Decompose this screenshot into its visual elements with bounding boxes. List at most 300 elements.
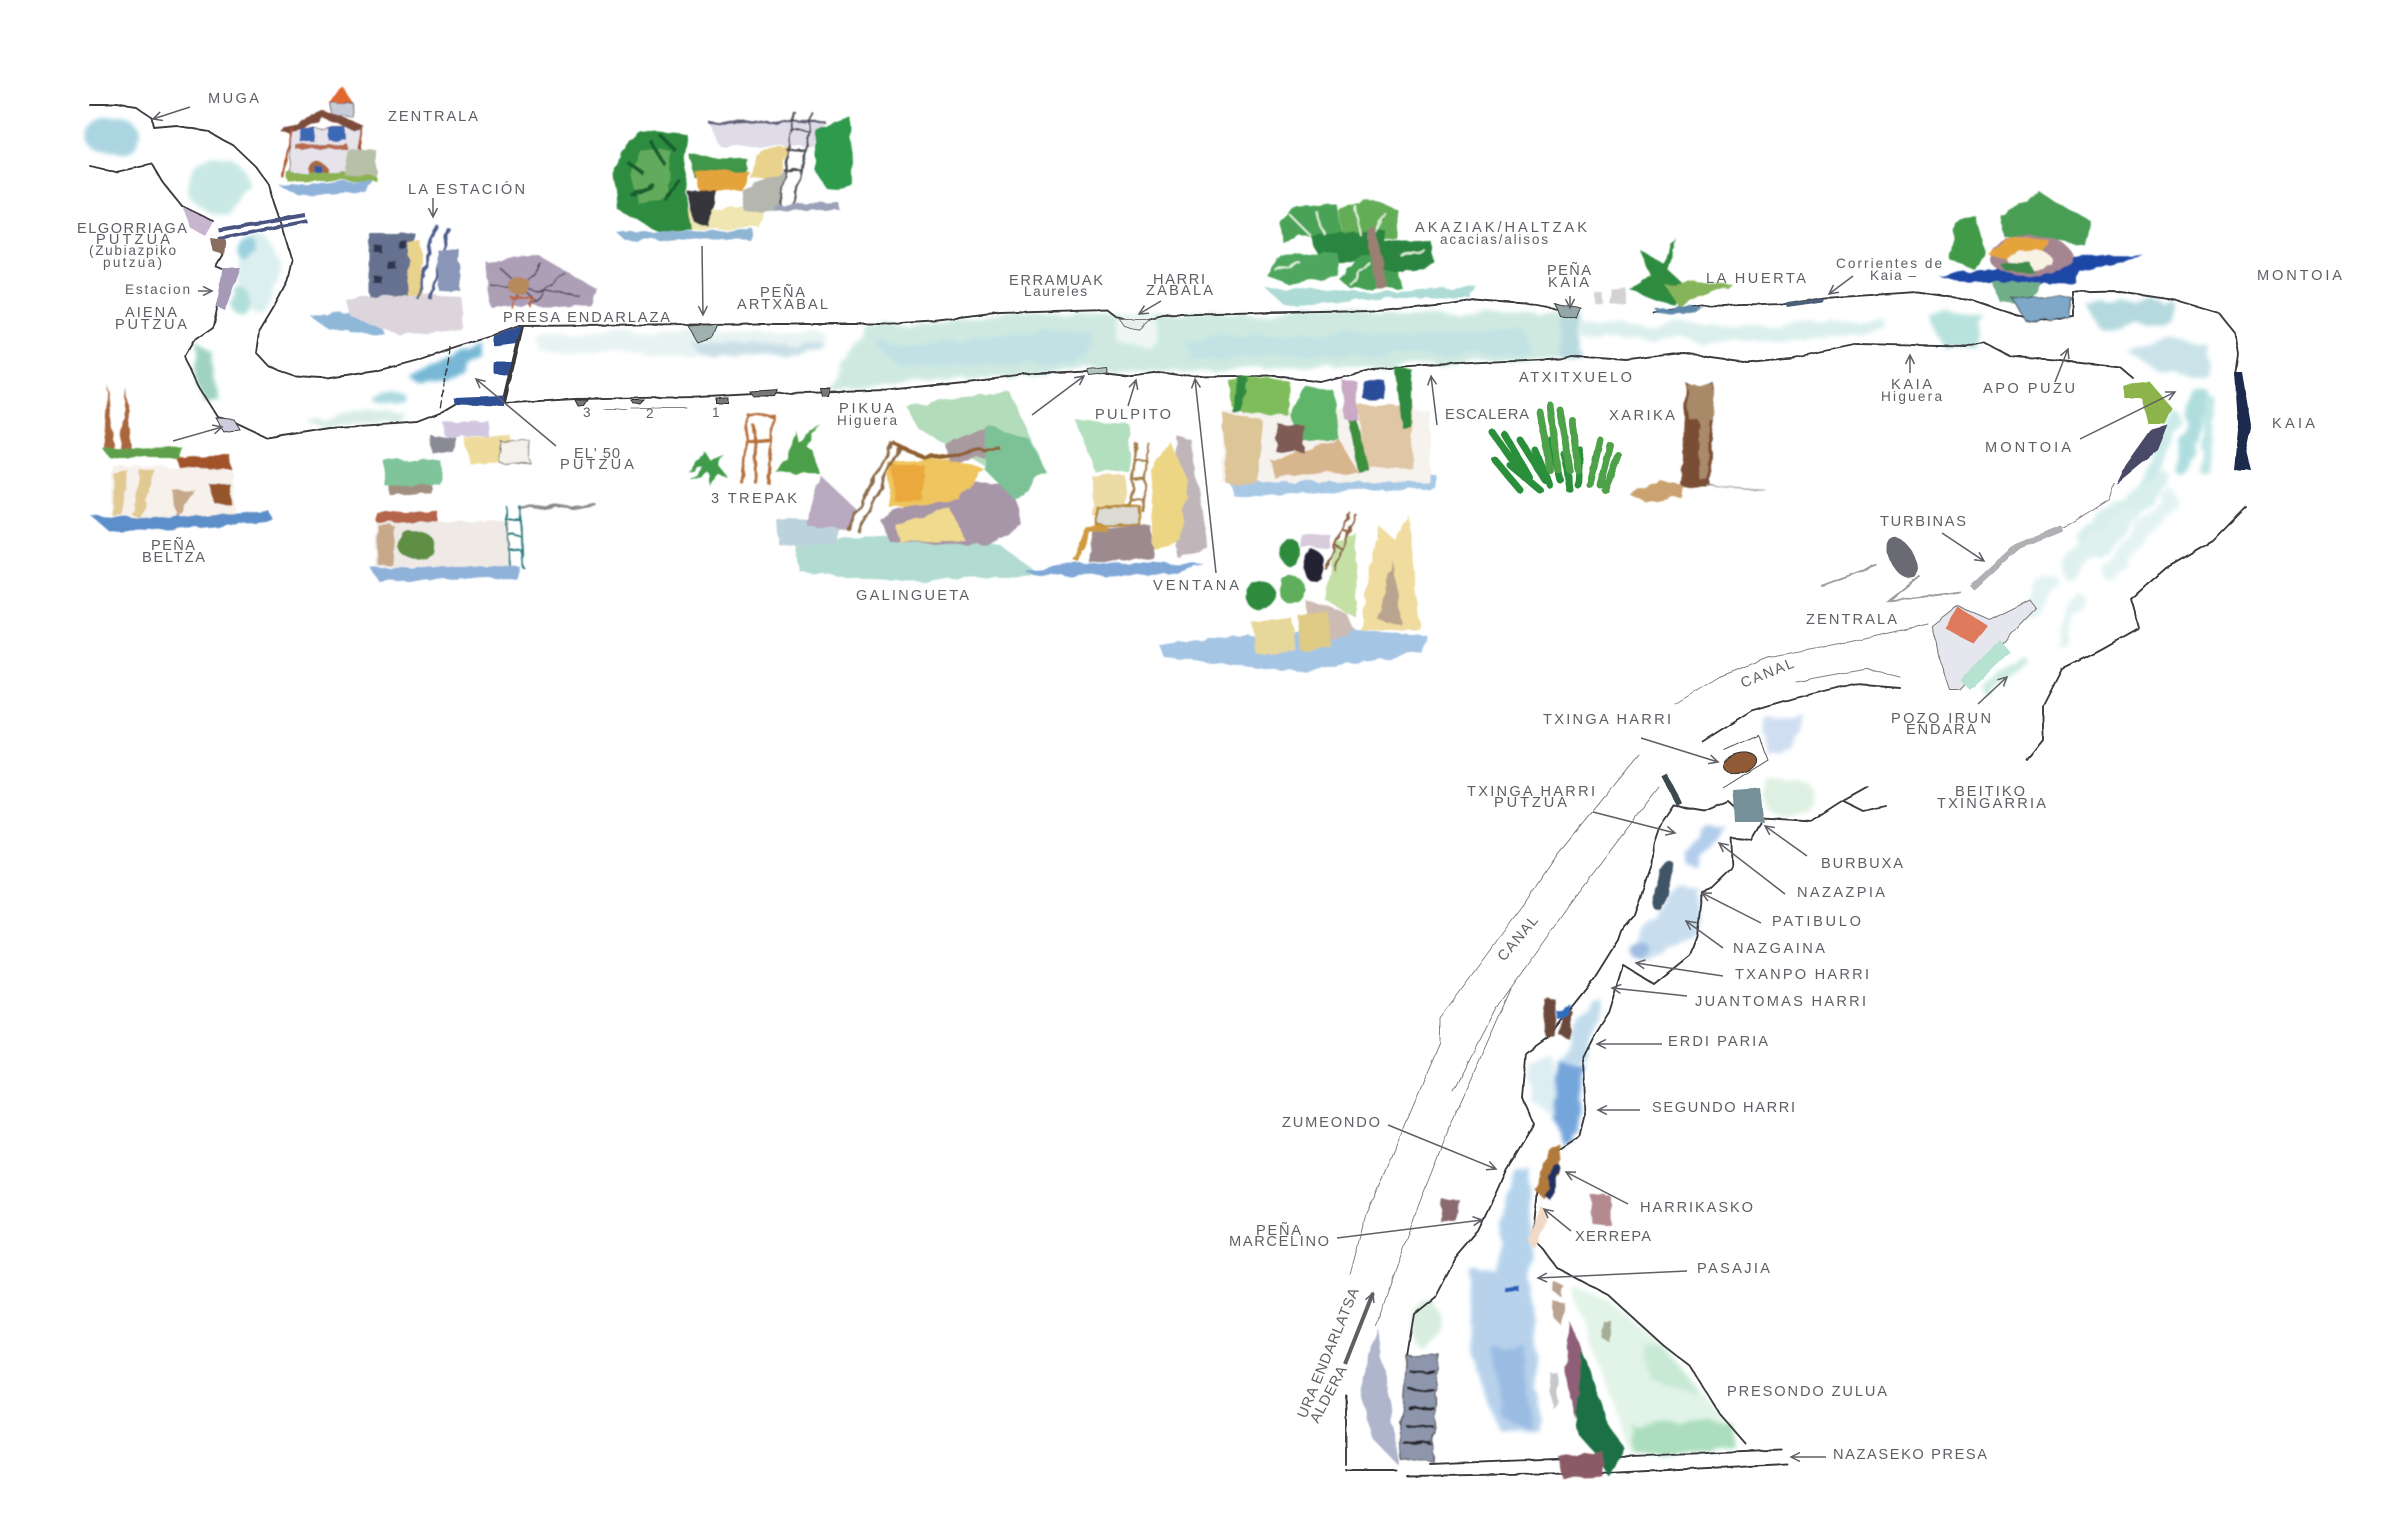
label: Nazgaina: NAZGAINA xyxy=(1733,941,1825,957)
wash: bend and dam approach xyxy=(305,344,484,426)
gray xyxy=(1176,436,1209,556)
label: Canal upper: CANAL xyxy=(1739,656,1796,692)
arrow: Nazazpia xyxy=(1719,843,1785,894)
door blue xyxy=(314,166,322,177)
north bank, Kaia reach xyxy=(1653,291,2249,470)
yellow rock xyxy=(750,146,790,180)
label: Harrikasko: HARRIKASKO xyxy=(1640,1200,1753,1216)
label: Canal lower: CANAL xyxy=(1495,913,1542,965)
chair brown xyxy=(1276,424,1304,452)
label: Peña Kaia: PEÑA xyxy=(1547,262,1591,279)
river water washes xyxy=(85,119,2212,1455)
island xyxy=(1649,858,1677,912)
label: Marcelino: MARCELINO xyxy=(1229,1234,1329,1250)
ladder xyxy=(1326,512,1356,570)
wall white xyxy=(1222,410,1430,482)
rocks xyxy=(880,480,1022,545)
green background xyxy=(905,392,1046,480)
label: Erdi Paria: ERDI PARIA xyxy=(1668,1034,1768,1050)
arrow: Turbinas xyxy=(1942,533,1984,561)
lower green xyxy=(1992,282,2040,304)
red roof xyxy=(1945,607,1988,644)
scene: Galingueta xyxy=(775,392,1046,582)
dark xyxy=(388,485,432,494)
label: number 2: 2 xyxy=(646,406,654,421)
label: Endara: ENDARA xyxy=(1906,722,1976,738)
label: Pikua: PIKUA xyxy=(839,401,894,417)
label: Erramuak: ERRAMUAK xyxy=(1009,273,1103,289)
brown rock xyxy=(209,484,232,505)
navy xyxy=(1545,1165,1560,1200)
balcony xyxy=(295,144,348,149)
label: Segundo Harri: SEGUNDO HARRI xyxy=(1652,1100,1795,1116)
arrow: Peña Beltza xyxy=(173,427,222,441)
window xyxy=(500,441,530,463)
hatch xyxy=(431,436,455,453)
label: La Estación: LA ESTACIÓN xyxy=(408,181,525,198)
trunk top xyxy=(1687,385,1713,420)
label: Escalera: ESCALERA xyxy=(1445,407,1529,423)
yellow spire xyxy=(1360,515,1420,630)
label: Xerrepa: XERREPA xyxy=(1575,1229,1651,1245)
arrow: Txinga Harri xyxy=(1641,738,1718,762)
label: Harri: HARRI xyxy=(1153,272,1205,288)
rock blue xyxy=(1360,1326,1398,1465)
direction arrow xyxy=(1345,1293,1373,1364)
scene: Ventana rocks xyxy=(1158,512,1428,672)
clump right xyxy=(1378,240,1434,274)
wash: middle channel blues xyxy=(1495,1000,1602,1285)
water xyxy=(616,230,754,240)
arrow: Peña Kaia xyxy=(1569,296,1571,308)
south bank xyxy=(90,164,2134,438)
ground xyxy=(1708,486,1766,491)
brown pair xyxy=(1544,998,1572,1040)
wash: straight reach pale xyxy=(534,330,828,356)
scene: 3 Trepak xyxy=(686,415,820,486)
tree top xyxy=(1280,538,1300,566)
lower river left bank xyxy=(1407,806,1674,1356)
lilac xyxy=(1301,535,1331,548)
ladder xyxy=(780,112,812,205)
rail xyxy=(893,443,1000,458)
lilac xyxy=(443,421,489,436)
wash: lower basin blues and greens xyxy=(1413,1270,1738,1455)
label: Zabala: ZABALA xyxy=(1146,283,1213,299)
fence plant xyxy=(346,150,376,176)
scene: Txinga Harri hut xyxy=(1664,735,1768,822)
turbine oval xyxy=(1880,532,1924,584)
rocks tan xyxy=(1552,1282,1564,1326)
arrow: Muga xyxy=(153,107,190,119)
top line xyxy=(708,121,825,123)
harrikasko rock xyxy=(1535,1146,1562,1200)
arrow: Estacion xyxy=(198,290,212,292)
label: Zentrala 2: ZENTRALA xyxy=(1806,612,1897,628)
island pink edge xyxy=(1565,1322,1582,1420)
chair blue xyxy=(1363,380,1384,399)
rock tans xyxy=(112,470,155,518)
hut frame xyxy=(1723,735,1768,788)
east bank Montoia xyxy=(2027,507,2246,760)
posts xyxy=(283,128,361,178)
tan wedge xyxy=(172,490,195,518)
scene: Apo Puzu house xyxy=(1939,192,2144,320)
label: Turbinas: TURBINAS xyxy=(1880,514,1966,530)
yellow bottom xyxy=(895,508,965,542)
rock white xyxy=(110,465,236,522)
yellow xyxy=(463,435,514,464)
water xyxy=(310,310,386,335)
water xyxy=(90,512,274,532)
label: Presa Endarlaza: PRESA ENDARLAZA xyxy=(503,310,670,326)
box right xyxy=(1590,1195,1610,1224)
Presa Endarlaza dam xyxy=(440,326,522,410)
label: Estacion: Estacion xyxy=(125,282,190,297)
water xyxy=(1654,306,1703,313)
tan left xyxy=(1222,412,1262,484)
label: Putzua 3: PUTZUA xyxy=(560,457,634,473)
green pale xyxy=(1325,532,1356,618)
water green xyxy=(795,535,1040,582)
building grey xyxy=(1932,600,2036,690)
leaf strokes xyxy=(625,135,680,200)
rock green xyxy=(1601,1320,1610,1343)
label: Muga: MUGA xyxy=(208,91,259,107)
arrow: Apo Puzu xyxy=(2055,349,2068,382)
right tree xyxy=(815,117,853,190)
wash: main mint reach xyxy=(826,312,1581,387)
tree mid xyxy=(1279,576,1305,604)
tower xyxy=(105,385,131,449)
maroon box xyxy=(1558,1452,1603,1478)
tree left xyxy=(1246,581,1276,611)
arrow: Harri Zabala xyxy=(1139,301,1161,314)
line xyxy=(519,505,596,508)
label: Kaia corrientes: Kaia – xyxy=(1870,268,1916,283)
green ledge xyxy=(103,447,182,458)
clump lower xyxy=(1340,254,1402,288)
bush xyxy=(1665,282,1733,308)
scene: stone wall xyxy=(486,256,598,309)
scene: La Estacion tower xyxy=(310,224,463,335)
rocks xyxy=(346,292,463,335)
windows xyxy=(300,128,346,142)
water xyxy=(1025,563,1204,576)
tans xyxy=(378,525,394,565)
ladder xyxy=(847,443,900,532)
pool top edge xyxy=(1674,787,1886,821)
blue pair xyxy=(1555,1004,1570,1018)
box left xyxy=(1440,1200,1460,1221)
trunk xyxy=(1367,228,1388,288)
label: Pulpito: PULPITO xyxy=(1095,407,1171,423)
arrow: Xerrepa xyxy=(1544,1209,1571,1231)
house white xyxy=(2008,250,2052,270)
rock dark stripe xyxy=(1378,560,1402,625)
rock yellow left xyxy=(1252,618,1296,654)
north bank xyxy=(90,105,1560,378)
label: Zentrala: ZENTRALA xyxy=(388,109,478,125)
label: acacias alisos: acacias/alisos xyxy=(1440,232,1548,247)
label: Pozo Irun: POZO IRUN xyxy=(1891,711,1991,727)
label: number 1: 1 xyxy=(712,405,720,420)
door xyxy=(307,162,328,178)
Montoia rock xyxy=(2116,425,2168,484)
trees left xyxy=(1950,215,1985,270)
label: Pasajia: PASAJIA xyxy=(1697,1261,1770,1277)
bridge Elgorriaga xyxy=(183,207,307,310)
roof xyxy=(376,512,438,522)
scene: Escalera wall xyxy=(1222,367,1436,496)
label: Atxitxuelo: ATXITXUELO xyxy=(1519,370,1632,386)
water xyxy=(1158,628,1428,672)
right block xyxy=(438,250,460,290)
label: Higuera: Higuera xyxy=(837,413,897,428)
teal wash xyxy=(1960,640,2010,690)
tan mid xyxy=(1270,440,1358,478)
label: Aiena: AIENA xyxy=(125,305,177,321)
arrow: El 50 xyxy=(476,379,556,446)
label: Txinga Harri 2: TXINGA HARRI xyxy=(1467,784,1595,800)
canal inner lines xyxy=(1376,787,1659,1326)
rock yellow mid xyxy=(1298,612,1332,650)
water under house xyxy=(279,180,374,196)
label: La Huerta: LA HUERTA xyxy=(1706,271,1806,287)
label: Kaia 1: KAIA xyxy=(1548,275,1589,291)
pale purple wall xyxy=(708,122,825,146)
pink xyxy=(1342,380,1358,420)
arrow: Harrikasko xyxy=(1566,1172,1628,1204)
orange rock xyxy=(693,170,750,192)
label: Txinga Harri: TXINGA HARRI xyxy=(1543,712,1671,728)
tree right xyxy=(985,425,1045,500)
rock xyxy=(1088,525,1155,562)
dark stripe xyxy=(1395,367,1412,428)
leaves xyxy=(1630,238,1690,305)
trunk highlight xyxy=(1698,395,1710,480)
label: putzua: putzua) xyxy=(103,255,162,270)
scene: Pulpito xyxy=(1025,420,1209,576)
label: number 3: 3 xyxy=(583,405,591,420)
roof xyxy=(176,455,231,470)
left tree lighter xyxy=(630,150,670,205)
scene: Kaia dark cliff xyxy=(2116,372,2251,484)
label: Txingarria: TXINGARRIA xyxy=(1937,796,2046,812)
arrow: Nazgaina xyxy=(1686,921,1723,948)
wash: upper pool xyxy=(85,119,278,402)
clump top left xyxy=(1280,204,1345,245)
bank beside canal xyxy=(1703,684,1900,742)
pool xyxy=(2012,296,2070,320)
rock left xyxy=(806,475,857,530)
ladder xyxy=(417,224,449,300)
label: Patibulo: PATIBULO xyxy=(1772,914,1861,930)
arrow: Juantomas Harri xyxy=(1612,988,1687,996)
gray blue xyxy=(775,519,842,546)
label: Laureles: Laureles xyxy=(1024,284,1087,299)
label: Putzua 2: PUTZUA xyxy=(115,317,187,333)
label: Apo Puzu: APO PUZU xyxy=(1983,381,2075,397)
label: Montoia: MONTOIA xyxy=(1985,440,2071,456)
arrow: Segundo Harri xyxy=(1598,1109,1640,1111)
canal lines xyxy=(1350,755,1639,1275)
ladder xyxy=(506,506,522,567)
clump top right xyxy=(1338,198,1398,240)
green island xyxy=(1570,1322,1624,1478)
wall xyxy=(376,522,510,567)
water xyxy=(1265,286,1477,306)
yellow xyxy=(1152,442,1188,550)
label: Ura Endarlatsa: URA ENDARLATSA xyxy=(1295,1286,1363,1421)
dark stripe low xyxy=(1348,420,1370,472)
arrow: Escalera xyxy=(1431,376,1437,425)
gray rock xyxy=(742,170,785,212)
centre tree xyxy=(690,155,748,178)
rock right xyxy=(1305,600,1355,640)
deep water xyxy=(1939,255,2144,284)
scene: La Huerta plant xyxy=(1594,238,1733,313)
label: Xarika: XARIKA xyxy=(1609,408,1675,424)
label: Zubiazpiko: (Zubiazpiko xyxy=(89,243,176,258)
fern strokes dark xyxy=(1492,432,1580,490)
label: Beltza: BELTZA xyxy=(142,550,205,566)
arrow: Pozo Irun xyxy=(1978,677,2007,704)
house green xyxy=(2000,262,2034,273)
dark leaf xyxy=(1232,378,1248,412)
arrow: Zumeondo xyxy=(1388,1125,1496,1169)
steeple xyxy=(329,85,353,103)
label: Nazazpia: NAZAZPIA xyxy=(1797,885,1885,901)
scene: lower river rocks xyxy=(1360,858,1677,1478)
arrow: Ventana xyxy=(1195,379,1216,573)
arrow: Burbuxa xyxy=(1765,826,1807,856)
left tree xyxy=(614,130,692,232)
label: Zumeondo: ZUMEONDO xyxy=(1282,1115,1380,1131)
label: Txanpo Harri: TXANPO HARRI xyxy=(1735,967,1869,983)
label: Montoia top: MONTOIA xyxy=(2257,268,2342,284)
label: Peña: PEÑA xyxy=(760,284,805,301)
ledge xyxy=(774,202,840,210)
label: Nazaseko Presa: NAZASEKO PRESA xyxy=(1833,1447,1987,1463)
house rim xyxy=(1988,236,2072,276)
pipe xyxy=(1076,528,1107,561)
label: Kaia low: KAIA xyxy=(1891,377,1932,393)
arrow: Pulpito xyxy=(1128,380,1136,406)
label: Burbuxa: BURBUXA xyxy=(1821,856,1903,872)
arrow: Txanpo Harri xyxy=(1636,963,1723,976)
purple top rock xyxy=(945,425,1010,462)
arrow: Patibulo xyxy=(1702,893,1761,923)
arrow: Corrientes xyxy=(1829,276,1853,294)
scene: Turbinas and Zentrala xyxy=(1821,528,2062,690)
gray streak xyxy=(1549,1372,1557,1408)
tunnel xyxy=(1304,550,1324,582)
green xyxy=(1076,420,1130,472)
rock pale xyxy=(657,206,764,230)
label: Higuera 2: Higuera xyxy=(1881,389,1942,404)
dark gap xyxy=(688,190,716,226)
clump centre xyxy=(1310,230,1385,262)
west bank after Montoia xyxy=(2021,483,2114,547)
body xyxy=(290,128,361,178)
lower river right bank xyxy=(1532,823,1761,1444)
right plant xyxy=(775,424,820,474)
label: Putzua 4: PUTZUA xyxy=(1494,795,1567,811)
ladder frame xyxy=(742,415,773,484)
label: 3 Trepak: 3 TREPAK xyxy=(711,491,797,507)
zigzag pipe xyxy=(1821,565,1961,601)
tan right xyxy=(1357,405,1413,468)
scene: tree and rock above Peña Artxabal xyxy=(614,112,853,240)
label: Akaziak Haltzak: AKAZIAK/HALTZAK xyxy=(1415,220,1587,236)
arrow: Nazaseko Presa xyxy=(1791,1456,1826,1458)
label: Putzua 1: PUTZUA xyxy=(96,232,170,248)
block xyxy=(369,233,415,296)
ladder xyxy=(1130,442,1148,512)
structure bars xyxy=(1404,1372,1436,1444)
box xyxy=(1097,507,1140,525)
upper canal xyxy=(1675,624,1928,704)
arrow: Artxabal scene xyxy=(702,246,703,315)
orange xyxy=(888,458,985,508)
yellow strip xyxy=(408,242,422,296)
trees top xyxy=(2000,192,2090,245)
scene: Zentrala house xyxy=(279,85,376,196)
label: Presondo Zulua: PRESONDO ZULUA xyxy=(1727,1384,1887,1400)
label: Corrientes de: Corrientes de xyxy=(1836,256,1942,271)
pink rock xyxy=(1527,1205,1548,1250)
scene: Escalera fern xyxy=(1492,405,1618,490)
scene: Xarika trunk xyxy=(1630,383,1766,502)
scene: Akaziak tree xyxy=(1265,198,1477,306)
arrow: Erdi Paria xyxy=(1597,1043,1662,1045)
label: Galingueta: GALINGUETA xyxy=(856,588,969,604)
label: Aldera: ALDERA xyxy=(1307,1363,1351,1426)
arrow: Pikua xyxy=(1032,376,1084,415)
arrow: Montoia xyxy=(2080,392,2175,439)
fern strokes upright xyxy=(1540,405,1618,490)
scene: Peña Beltza xyxy=(90,385,274,532)
arrow: La Estación xyxy=(432,198,434,217)
label: Beitiko: BEITIKO xyxy=(1955,784,2025,800)
label: Peña 2: PEÑA xyxy=(151,537,195,554)
label: Kaia right: KAIA xyxy=(2272,416,2315,432)
arrow: Peña Marcelino xyxy=(1337,1220,1482,1238)
grass xyxy=(287,172,376,181)
water xyxy=(371,566,519,581)
trunk xyxy=(1681,383,1714,487)
leaf strokes xyxy=(1275,205,1425,285)
channel wall xyxy=(1972,528,2062,588)
label: Juantomas Harri: JUANTOMAS HARRI xyxy=(1695,994,1866,1010)
stepped structure xyxy=(1399,1355,1439,1461)
Montoia bush xyxy=(2122,382,2172,424)
green block xyxy=(384,460,440,485)
arrow: Kaia Higuera xyxy=(1909,355,1911,373)
pool rocks xyxy=(1733,788,1764,822)
arrow: Txinga Harri Putzua xyxy=(1593,812,1675,833)
clump left xyxy=(1266,252,1338,285)
left plant xyxy=(686,452,728,486)
label: Ventana: VENTANA xyxy=(1153,578,1239,594)
house yellow xyxy=(1986,238,2050,262)
bank rocks and markers xyxy=(216,298,1824,432)
blue spot xyxy=(1505,1287,1520,1292)
label: Peña 3: PEÑA xyxy=(1256,1222,1301,1239)
label: Artxabal: ARTXABAL xyxy=(737,297,828,313)
water xyxy=(1229,474,1436,496)
